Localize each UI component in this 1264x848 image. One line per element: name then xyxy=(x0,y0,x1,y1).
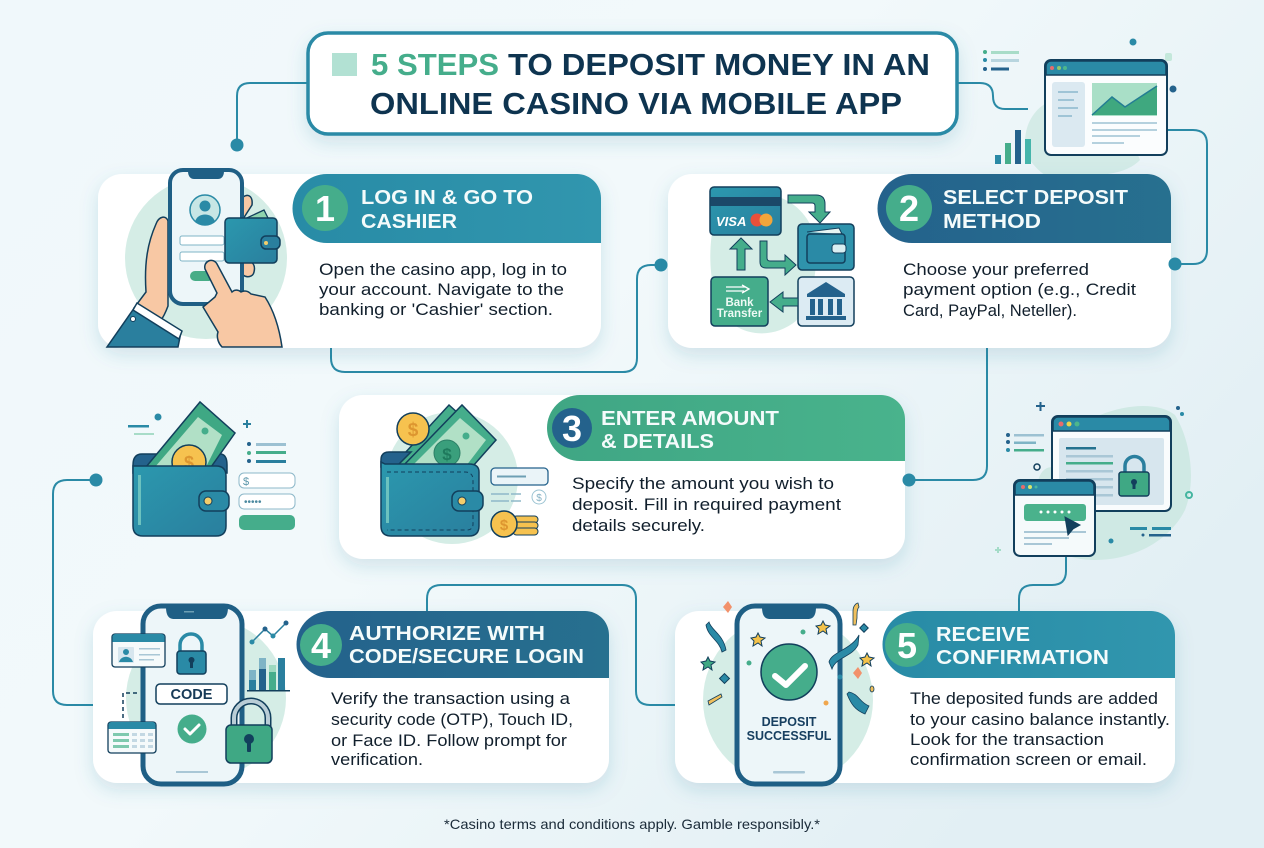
step 2 description: Choose your preferred xyxy=(903,260,1089,279)
badge 1 xyxy=(302,185,348,231)
connector dot: step 2 right xyxy=(1168,258,1182,270)
heading 4 line 2: CODE/SECURE LOGIN xyxy=(349,645,584,668)
illustration: wallet with sign-in form: $ xyxy=(184,453,194,473)
panel: step 1 xyxy=(98,170,601,348)
step 2 header xyxy=(878,174,1171,243)
title text line 2: ONLINE CASINO VIA MOBILE APP xyxy=(370,86,902,121)
badge 5 xyxy=(885,623,929,667)
illustration: payment methods flow: Transfer xyxy=(717,308,763,320)
step 1 header xyxy=(292,174,601,243)
number 5: 5 xyxy=(897,625,917,666)
step 1 description: banking or 'Cashier' section. xyxy=(319,300,553,319)
heading 5 line 1: RECEIVE xyxy=(936,623,1030,646)
illustration: payment methods flow: VISA xyxy=(716,214,746,229)
title text line 1: TO DEPOSIT MONEY IN AN xyxy=(508,47,930,82)
step 5 description: Look for the transaction xyxy=(910,730,1104,749)
number 4: 4 xyxy=(311,625,331,666)
panel: step 4 xyxy=(93,606,609,784)
icon: analytics dashboard window xyxy=(983,38,1176,175)
heading 1 line 2: CASHIER xyxy=(361,210,457,233)
heading 1 line 1: LOG IN & GO TO xyxy=(361,186,533,209)
illustration: payment methods flow xyxy=(710,187,854,333)
step 4 description: or Face ID. Follow prompt for xyxy=(331,731,567,750)
step 5 description: The deposited funds are added xyxy=(910,689,1158,708)
illustration: wallet with sign-in form xyxy=(128,402,295,536)
illustration: wallet with sign-in form: $ xyxy=(243,476,249,488)
footnote: *Casino terms and conditions apply. Gamble responsibly.* xyxy=(444,816,821,832)
step 3 header xyxy=(547,395,905,461)
illustration: wallet with cash and coins: $ xyxy=(408,420,419,441)
illustration: wallet with sign-in form: ••••• xyxy=(244,497,262,508)
illustration: wallet with cash and coins xyxy=(381,405,548,544)
badge 2 xyxy=(886,185,932,231)
illustration: deposit successful phone with confetti: SUCCESSFUL xyxy=(747,729,832,743)
heading 3 line 1: ENTER AMOUNT xyxy=(601,407,780,430)
step 3 description: Specify the amount you wish to xyxy=(572,474,834,493)
illustration: hand holding phone with wallet xyxy=(107,170,287,347)
title bullet square xyxy=(332,53,357,76)
connector dot: left of wallet xyxy=(90,474,102,486)
step 4 description: security code (OTP), Touch ID, xyxy=(331,710,573,729)
illustration: phone with security code and locks xyxy=(108,606,290,784)
panel: step 3 xyxy=(339,395,905,559)
step 3 description: details securely. xyxy=(572,516,705,535)
number 2: 2 xyxy=(899,188,919,229)
number 1: 1 xyxy=(315,188,335,229)
illustration: deposit successful phone with confetti: DEPOSIT xyxy=(762,715,817,729)
connector dot: step 1 to step 2 xyxy=(654,258,668,272)
step 5 description: to your casino balance instantly. xyxy=(910,710,1170,729)
step 2 description: payment option (e.g., Credit xyxy=(903,280,1136,299)
illustration: deposit successful phone with confetti xyxy=(701,601,874,785)
step 1 description: Open the casino app, log in to xyxy=(319,260,567,279)
illustration: payment methods flow: Bank xyxy=(725,297,754,309)
step 4 description: verification. xyxy=(331,750,423,769)
heading 2 line 2: METHOD xyxy=(943,210,1041,233)
step 4 header xyxy=(296,611,609,678)
badge 4 xyxy=(300,624,342,666)
panel: step 2 xyxy=(668,174,1171,348)
heading 3 line 2: & DETAILS xyxy=(601,430,714,453)
heading 5 line 2: CONFIRMATION xyxy=(936,646,1109,669)
panel: step 5 xyxy=(675,601,1175,785)
step 5 description: confirmation screen or email. xyxy=(910,750,1147,769)
connector dot: step 3 right xyxy=(902,474,916,486)
heading 2 line 1: SELECT DEPOSIT xyxy=(943,186,1128,209)
step 2 description: Card, PayPal, Neteller). xyxy=(903,301,1077,320)
illustration: wallet with cash and coins: $ xyxy=(500,517,509,534)
connector lines xyxy=(53,83,1207,705)
title banner xyxy=(308,33,957,134)
illustration: phone with security code and locks: CODE xyxy=(170,686,212,703)
step 3 description: deposit. Fill in required payment xyxy=(572,495,841,514)
heading 4 line 1: AUTHORIZE WITH xyxy=(349,622,545,645)
title text: 5 steps: 5 STEPS xyxy=(371,47,499,82)
badge 3 xyxy=(552,408,592,448)
step 5 header xyxy=(882,611,1175,678)
illustration: secure login windows xyxy=(995,402,1192,560)
illustration: wallet with cash and coins: $ xyxy=(442,445,452,464)
connector dot: title to step 1 xyxy=(230,138,244,152)
step 1 description: your account. Navigate to the xyxy=(319,280,564,299)
illustration: wallet with cash and coins: $ xyxy=(536,493,542,504)
step 4 description: Verify the transaction using a xyxy=(331,689,571,708)
number 3: 3 xyxy=(562,408,582,449)
